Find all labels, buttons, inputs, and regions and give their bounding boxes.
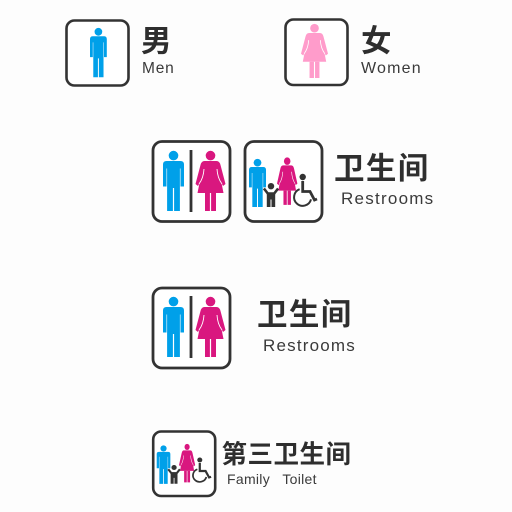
icon: sign frame family xyxy=(153,432,215,496)
heading: men Chinese: 男 xyxy=(141,24,172,58)
icon: wheelchair xyxy=(193,458,211,482)
icon: man blue xyxy=(90,28,107,77)
icon: child xyxy=(264,183,278,207)
label: Restrooms: Restrooms xyxy=(263,336,356,355)
panel: men sign xyxy=(66,20,175,86)
icon: woman magenta xyxy=(196,151,226,211)
icon: woman pink xyxy=(301,24,328,78)
icon: man blue small xyxy=(249,159,266,207)
icon: sign frame women xyxy=(286,20,348,85)
icon: sign frame male female xyxy=(153,288,230,368)
icon: woman magenta xyxy=(196,297,226,357)
heading: family toilet Chinese: 第三卫生间 xyxy=(222,441,352,469)
icon: sign frame male female xyxy=(153,142,230,222)
icon: man blue xyxy=(163,151,184,211)
heading: restrooms Chinese: 卫生间 xyxy=(334,152,430,186)
divider bar xyxy=(190,150,192,212)
icon: woman magenta small xyxy=(179,444,195,482)
label: Family Toilet: Family Toilet xyxy=(227,471,317,487)
icon: sign frame men xyxy=(66,20,128,86)
panel: restrooms single sign xyxy=(153,288,356,368)
panel: restrooms two signs xyxy=(153,142,434,222)
heading: restrooms Chinese: 卫生间 xyxy=(257,298,353,332)
icon: wheelchair xyxy=(294,174,317,206)
label: Women: Women xyxy=(361,60,422,77)
icon: woman magenta small xyxy=(277,157,297,205)
panel: family toilet xyxy=(153,432,352,496)
label: Restrooms: Restrooms xyxy=(341,189,434,208)
icon: man blue xyxy=(163,297,184,357)
heading: women Chinese: 女 xyxy=(361,24,392,58)
label: Men: Men xyxy=(142,60,175,77)
icon: sign frame family xyxy=(245,142,322,222)
icon: child xyxy=(168,465,180,484)
panel: women sign xyxy=(286,20,422,85)
divider bar xyxy=(190,296,192,358)
icon: man blue small xyxy=(157,445,170,484)
